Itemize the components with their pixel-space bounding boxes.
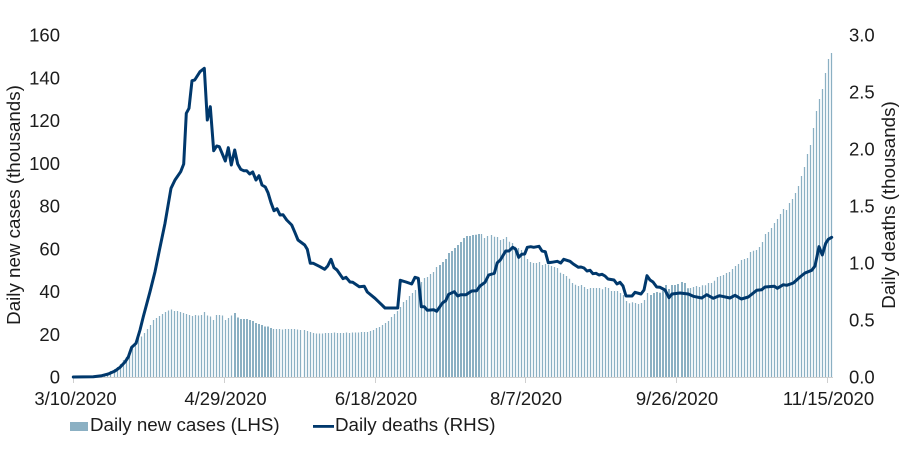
legend: daily deaths: Daily deaths (RHS) <box>335 414 495 435</box>
left axis labels: 0 <box>50 366 60 388</box>
right axis labels: 3.0 <box>849 24 875 46</box>
left axis labels: 20 <box>39 324 60 345</box>
x axis line and tick marks <box>73 377 833 383</box>
right axis labels: 1.0 <box>849 252 875 274</box>
right axis labels: 2.5 <box>849 82 875 102</box>
line series: daily deaths (RHS) <box>73 68 832 377</box>
right axis labels: 1.5 <box>849 196 875 216</box>
right axis labels: 0.0 <box>849 366 875 388</box>
left axis title: Daily new cases (thousands) <box>3 85 24 325</box>
right axis title: Daily deaths (thousands) <box>878 101 899 309</box>
left axis labels: 120 <box>29 110 60 131</box>
x axis date labels: 11/15/2020 <box>783 388 874 409</box>
right axis labels <box>849 24 875 388</box>
right axis labels: 2.0 <box>849 138 875 160</box>
bar series: daily new cases (LHS) <box>92 53 832 377</box>
left axis labels: 140 <box>29 67 60 88</box>
left axis labels: 160 <box>29 24 60 46</box>
left axis labels <box>29 24 60 388</box>
legend: daily new cases: Daily new cases (LHS) <box>90 414 280 435</box>
x axis date labels: 8/7/2020 <box>490 388 562 409</box>
left axis labels: 80 <box>39 196 60 216</box>
x axis date labels: 9/26/2020 <box>636 388 718 409</box>
left axis labels: 40 <box>39 281 60 302</box>
left axis labels: 60 <box>39 238 60 259</box>
x axis date labels: 6/18/2020 <box>335 388 417 409</box>
x axis date labels: 3/10/2020 <box>34 388 117 409</box>
x axis date labels: 4/29/2020 <box>184 388 267 409</box>
left axis labels: 100 <box>29 153 60 174</box>
right axis labels: 0.5 <box>849 310 875 330</box>
x axis date labels <box>34 388 874 409</box>
